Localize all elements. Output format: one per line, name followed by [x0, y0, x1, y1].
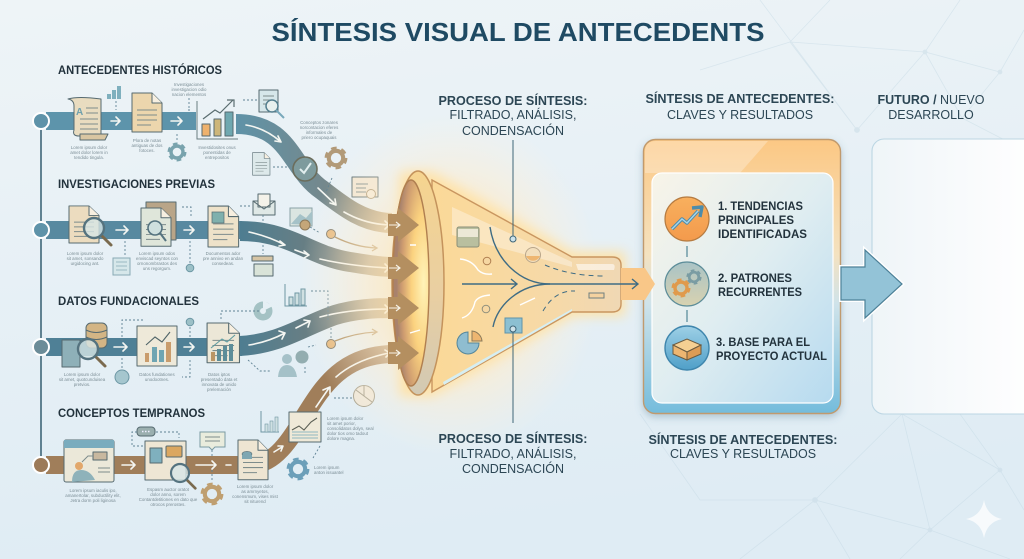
icon: speech bubble grey — [137, 427, 155, 436]
item 1 text: 1. TENDENCIAS — [718, 201, 803, 213]
icon: tan gear — [327, 149, 345, 167]
neck slot — [589, 293, 604, 298]
heading: ANTECEDENTES HISTÓRICOS — [58, 64, 222, 77]
captions: entrepositos — [205, 155, 230, 160]
captions: dolor tios omo tadout — [327, 431, 369, 436]
icon: small chart — [285, 284, 307, 306]
small node — [186, 264, 194, 272]
process label bottom: PROCESO DE SÍNTESIS: — [438, 431, 588, 446]
funnel rim — [392, 171, 444, 395]
captions: Lorem ipsum dolor — [71, 145, 108, 150]
icon: small document — [113, 258, 130, 275]
captions: sit amet, sonsando — [67, 256, 104, 261]
heading: CONCEPTOS TEMPRANOS — [58, 408, 205, 420]
icon: pie chart — [254, 300, 273, 320]
icon: search document — [259, 90, 284, 118]
captions: investigacion odio — [172, 87, 207, 92]
icon: envelope — [253, 194, 275, 215]
icon: window — [352, 177, 378, 198]
outer card — [644, 140, 840, 414]
title: SÍNTESIS VISUAL DE ANTECEDENTS — [272, 17, 764, 47]
callout line bottom — [510, 326, 516, 423]
timeline node — [33, 457, 49, 473]
icon: scroll: A — [76, 107, 83, 118]
arrow — [171, 117, 182, 125]
row 2: investigaciones previas — [33, 179, 394, 276]
captions: Jetra dorm poli liginosa — [70, 498, 116, 503]
icon: glass ball — [526, 248, 540, 262]
captions: Lorem ipsum dolor — [327, 416, 364, 421]
item 3 text: PROYECTO ACTUAL — [716, 351, 827, 363]
icon: small bars — [107, 86, 121, 99]
icon: chart card — [289, 412, 321, 442]
captions: nacion elementos — [172, 92, 207, 97]
panel: future development — [872, 139, 1024, 414]
icon: browser window — [64, 440, 114, 482]
icon: pie chart — [457, 331, 482, 354]
small arrows on heads — [389, 222, 400, 356]
captions: prelemación — [207, 387, 232, 392]
track — [46, 221, 242, 239]
icon: tan gear — [203, 485, 221, 503]
captions: fotoces. — [139, 148, 155, 153]
captions: uns regorgum. — [143, 266, 171, 271]
network pattern background — [640, 0, 1024, 559]
row 4: conceptos tempranos — [33, 350, 394, 507]
icon: small chart — [261, 411, 279, 432]
captions: consolidatos dolyn, seal — [327, 426, 374, 431]
arrow — [111, 117, 120, 125]
heading: INVESTIGACIONES PREVIAS — [58, 179, 215, 191]
panel: key results — [644, 140, 840, 414]
arrow — [184, 343, 194, 351]
timeline node — [33, 222, 49, 238]
captions: dolor anno, sorem — [150, 492, 186, 497]
synthesis label top: SÍNTESIS DE ANTECEDENTES: — [646, 91, 834, 106]
captions: anton issuantel — [314, 470, 344, 475]
inner card — [652, 173, 833, 403]
item 2 text: RECURRENTES — [718, 287, 802, 299]
row 1: antecedentes históricos — [33, 64, 392, 229]
captions: norcontacion eferes — [300, 125, 339, 130]
captions — [67, 251, 244, 271]
icon: chart document — [253, 153, 270, 175]
synthesis label bottom: SÍNTESIS DE ANTECEDENTES: — [648, 432, 838, 447]
captions: priero ocupaquais — [302, 135, 337, 140]
process label top — [438, 93, 588, 138]
icon: databases with magnifier — [62, 323, 107, 367]
captions: ornonombrastos des — [137, 261, 178, 266]
funnel — [300, 112, 625, 456]
icon: cards with magnifier — [145, 441, 195, 488]
captions: consedeas. — [212, 261, 234, 266]
arrow — [196, 461, 231, 469]
captions: innovata de unido — [202, 382, 237, 387]
captions: ponentidas de — [203, 150, 231, 155]
captions: Lorem ipsum dolor — [237, 484, 274, 489]
captions: Datos iptos — [208, 372, 231, 377]
icon: circular diagram — [354, 386, 374, 406]
icon: database document — [238, 440, 268, 480]
funnel glow — [300, 112, 600, 456]
stream arrows — [249, 232, 389, 272]
future label: FUTURO / NUEVO — [878, 93, 984, 107]
stream arrowheads — [388, 208, 419, 370]
stream arrows — [274, 350, 390, 452]
arrow — [184, 226, 194, 234]
icon: bar chart — [197, 100, 238, 139]
heading: DATOS FUNDACIONALES — [58, 296, 199, 308]
captions: Conceptos zonares — [300, 120, 339, 125]
icon: document — [132, 93, 162, 132]
stream — [240, 308, 394, 346]
timeline vertical line — [40, 121, 42, 465]
captions: unodootnes. — [145, 377, 169, 382]
synthesis label bottom: CLAVES Y RESULTADOS — [670, 447, 816, 461]
captions — [70, 82, 339, 160]
captions: sit amet porior, — [327, 421, 356, 426]
stream arrows — [249, 305, 389, 345]
captions: Investigaciones — [174, 82, 205, 87]
neck highlight — [576, 264, 615, 270]
dashed connectors — [125, 206, 320, 264]
stream — [236, 124, 392, 223]
flow node with arrow — [326, 329, 377, 348]
funnel body — [432, 180, 621, 392]
captions: urgidocing ant. — [71, 261, 99, 266]
small circles — [482, 257, 491, 313]
icon: chart card — [137, 326, 177, 366]
future label: DESARROLLO — [888, 108, 974, 122]
item 3 text — [716, 337, 827, 363]
captions: Lorem ipsum dolor — [64, 372, 101, 377]
captions: dolore magna. — [327, 436, 355, 441]
captions: Investidosites onus — [198, 145, 236, 150]
captions: pretvios. — [74, 382, 90, 387]
icon: sparkle — [966, 500, 1002, 538]
icon: person and cloud — [278, 350, 308, 377]
icon: speech bubble — [200, 432, 225, 450]
captions: Lorem ipsum odos — [139, 251, 176, 256]
icon: tray — [252, 256, 273, 276]
stream — [240, 231, 394, 267]
captions: antiguas de dos — [131, 143, 163, 148]
captions: otrocos prerostes. — [150, 502, 186, 507]
track — [46, 112, 196, 130]
captions: Plora de notas — [133, 138, 162, 143]
icon: trend — [665, 197, 709, 241]
captions: amet dolor lorem in — [70, 150, 108, 155]
connectors — [686, 246, 688, 322]
icon: checkmark badge — [293, 157, 317, 181]
stream arrows — [246, 125, 389, 229]
icon: document stack — [141, 202, 176, 246]
captions: as amrnyetos, — [241, 489, 269, 494]
captions: presentado data et — [201, 377, 238, 382]
dashed connectors — [132, 398, 352, 482]
icon: image card — [290, 208, 312, 230]
item 3 text: 3. BASE PARA EL — [716, 337, 810, 349]
dashed connectors — [116, 98, 332, 192]
track and stream — [46, 354, 394, 465]
captions: Espasm auctor oratot — [147, 487, 190, 492]
callout line top — [510, 140, 516, 242]
timeline node — [33, 339, 49, 355]
process label top: PROCESO DE SÍNTESIS: — [438, 93, 588, 108]
item 2 text — [718, 273, 802, 299]
timeline node — [33, 113, 49, 129]
process label top: FILTRADO, ANÁLISIS, — [450, 107, 576, 122]
icon: chart document — [207, 323, 239, 363]
icon: gears — [665, 262, 709, 306]
captions: Datos fundationes — [139, 372, 175, 377]
icon: article document — [208, 206, 239, 247]
row 3: datos fundacionales — [33, 284, 394, 392]
captions — [59, 372, 238, 392]
process label bottom: FILTRADO, ANÁLISIS, — [450, 446, 576, 461]
arrow — [122, 461, 135, 469]
funnel mouth — [393, 180, 429, 386]
body highlight — [452, 207, 572, 267]
captions: informales de — [306, 130, 333, 135]
dashed connectors — [122, 291, 331, 377]
process label top: CONDENSACIÓN — [462, 123, 564, 138]
small nodes — [115, 318, 194, 384]
item 1 text: IDENTIFICADAS — [718, 229, 807, 241]
blurred halo — [400, 172, 625, 396]
lower edge highlight — [443, 309, 572, 385]
process label bottom: CONDENSACIÓN — [462, 461, 564, 476]
captions: conensmum, vises mist — [232, 494, 279, 499]
synthesis label top: CLAVES Y RESULTADOS — [667, 108, 813, 122]
captions: amanertolar, subductility elit, — [65, 493, 121, 498]
captions: pre annivo en andan — [203, 256, 244, 261]
captions — [65, 416, 374, 507]
process label bottom — [438, 431, 588, 476]
arrow to future — [841, 250, 902, 318]
captions: Lorem ipsum dolor — [67, 251, 104, 256]
captions: Contantdetitiones en dato que — [139, 497, 198, 502]
orange output connector — [621, 268, 655, 300]
captions: Lorem ipsum iaculis ipo, — [69, 488, 117, 493]
item 2 text: 2. PATRONES — [718, 273, 792, 285]
captions: sit niturend — [244, 499, 266, 504]
icon: stacked box — [457, 227, 479, 247]
flow node with arrow — [326, 230, 377, 251]
synthesis label top — [646, 91, 834, 122]
icon: blue gear — [289, 460, 307, 478]
icon: gear — [170, 144, 184, 160]
track — [46, 338, 242, 356]
item 1 text: PRINCIPALES — [718, 215, 794, 227]
captions: Documentos ador — [206, 251, 241, 256]
captions: enviscad seyntos con — [136, 256, 179, 261]
top highlight — [645, 141, 768, 173]
icon: blue square — [505, 318, 522, 333]
captions: tendido tingula. — [74, 155, 104, 160]
arrow — [116, 226, 128, 234]
captions: Lorem ipsum — [314, 465, 340, 470]
icon: scroll — [68, 98, 108, 140]
synthesis label bottom — [648, 432, 838, 461]
arrow — [114, 343, 127, 351]
flow lines — [462, 227, 621, 327]
white particles — [410, 245, 535, 333]
item 1 text — [718, 201, 807, 241]
captions: sit amet, quotcunduisea — [59, 377, 106, 382]
icon: document with magnifier — [69, 206, 111, 245]
icon: box — [665, 326, 709, 370]
output arrow — [621, 279, 638, 289]
